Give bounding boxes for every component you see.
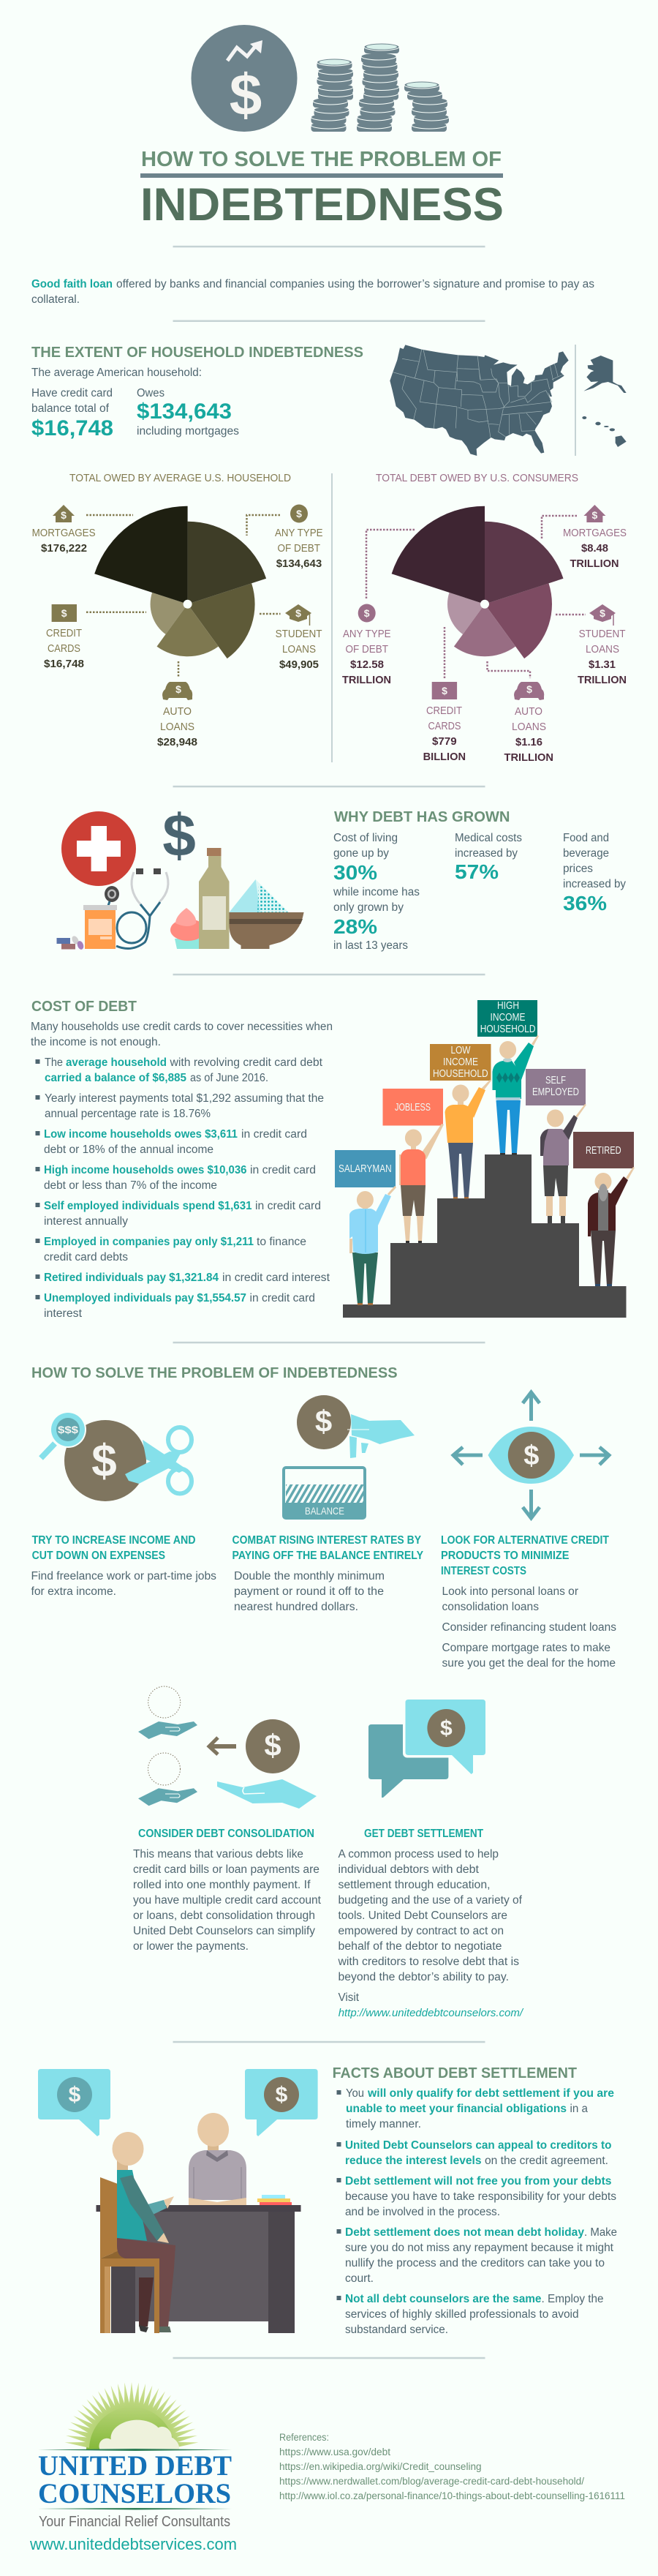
label: student loans: LOANS xyxy=(282,643,316,656)
bullet list: as of June 2016. xyxy=(190,1072,268,1084)
person: self employed xyxy=(526,1069,586,1223)
column: medical costs: increased by xyxy=(455,847,518,860)
text: nearest hundred dollars. xyxy=(234,1601,358,1613)
panel: facts about debt settlement xyxy=(333,2065,617,2336)
illustration: debt counselling meeting xyxy=(38,2069,318,2333)
bullet list: sure you do not miss any repayment because it might xyxy=(345,2242,614,2254)
label: auto loans xyxy=(487,661,553,764)
bullet list: The xyxy=(45,1056,63,1069)
references: https://www.usa.gov/debt xyxy=(279,2447,390,2457)
heading: FACTS ABOUT DEBT SETTLEMENT xyxy=(333,2065,577,2081)
bullet list: reduce the interest levels xyxy=(345,2155,481,2167)
label: credit cards: $779 xyxy=(432,735,457,748)
bullet list: carried a balance of $6,885 xyxy=(45,1072,186,1084)
icon: coin with magnifier and scissors: $ xyxy=(91,1436,117,1487)
text: This means that various debts like xyxy=(133,1848,303,1860)
bullet list: High income households owes $10,036 xyxy=(44,1164,247,1176)
stairs xyxy=(343,1154,626,1318)
column: cost of living: Cost of living xyxy=(333,832,398,844)
tip: cut expenses xyxy=(31,1411,216,1598)
text: individual debtors with debt xyxy=(338,1863,480,1876)
heading: COST OF DEBT xyxy=(31,999,137,1015)
map: Alaska and Hawaii xyxy=(582,356,627,447)
icon: hand dropping coin in box: $ xyxy=(315,1404,332,1438)
label: credit cards: $16,748 xyxy=(44,658,84,670)
bullet list xyxy=(35,1056,330,1320)
tip: debt consolidation xyxy=(133,1686,322,1953)
bullet list: . Employ the xyxy=(541,2293,604,2305)
label: mortgages xyxy=(32,505,133,555)
wordmark xyxy=(38,2450,232,2530)
label: any type of debt xyxy=(247,505,323,570)
icon: cupcake xyxy=(170,908,205,949)
label: any type of debt: TRILLION xyxy=(342,674,391,686)
icon: bottle xyxy=(199,848,230,949)
column: food and beverage: prices xyxy=(563,863,593,875)
person: low income household: HOUSEHOLD xyxy=(433,1068,488,1080)
title: INDEBTEDNESS xyxy=(140,179,504,230)
icon: coin passing between hands xyxy=(138,1686,317,1809)
icon: coin stacks xyxy=(311,43,449,132)
text: or loans, debt consolidation through xyxy=(133,1910,315,1922)
text xyxy=(441,1534,616,1670)
icon: eye coin with arrows: $ xyxy=(523,1441,539,1471)
text: GET DEBT SETTLEMENT xyxy=(364,1828,483,1840)
label: any type of debt: $ xyxy=(364,607,370,619)
illustration: medical and food costs xyxy=(57,803,304,950)
bullet list: Yearly interest payments total $1,292 assuming that the xyxy=(45,1092,324,1105)
person: low income household: INCOME xyxy=(443,1056,478,1068)
text: Visit xyxy=(338,1991,360,2004)
column: cost of living xyxy=(333,832,420,952)
text block: average household: $134,643 xyxy=(137,399,232,424)
icon: eye coin with arrows xyxy=(453,1392,609,1518)
text: rolled into one monthly payment. If xyxy=(133,1879,311,1891)
bullet list: You xyxy=(346,2087,364,2100)
column: cost of living: only grown by xyxy=(333,901,404,914)
text xyxy=(133,1828,322,1953)
text xyxy=(337,1828,524,2019)
bullet list: in credit card interest xyxy=(222,1272,330,1284)
label: any type of debt: $12.58 xyxy=(350,658,384,671)
text: TRY TO INCREASE INCOME AND xyxy=(32,1534,196,1547)
text: with creditors to resolve debt that is xyxy=(337,1956,519,1968)
label: student loans xyxy=(260,604,322,671)
bullet list: . Make xyxy=(584,2226,617,2239)
label: any type of debt xyxy=(342,530,415,686)
text: LOOK FOR ALTERNATIVE CREDIT xyxy=(441,1534,609,1547)
icon: dollar coin with rising arrow: $ xyxy=(230,62,262,127)
bullet list xyxy=(336,2087,617,2336)
map: United States xyxy=(390,345,569,456)
text: for extra income. xyxy=(31,1585,116,1598)
illustration: people on income staircase xyxy=(335,1000,635,1318)
text block: average household: The average American household: xyxy=(31,367,202,379)
website url: www.uniteddebtservices.com xyxy=(29,2535,237,2553)
person: low income household xyxy=(430,1044,491,1198)
label: student loans: $1.31 xyxy=(589,658,616,671)
bullet list: with revolving credit card debt xyxy=(169,1056,323,1069)
bullet list: in credit card xyxy=(250,1164,316,1176)
label: student loans: TRILLION xyxy=(578,674,627,686)
column: medical costs: 57% xyxy=(455,860,499,883)
tip: pay off the balance xyxy=(232,1395,424,1613)
text: Consider refinancing student loans xyxy=(442,1621,616,1634)
icon: speech bubbles with coin: $ xyxy=(440,1716,453,1741)
label: auto loans: LOANS xyxy=(160,721,194,733)
speech bubble right xyxy=(245,2069,318,2136)
logo: United Debt Counselors xyxy=(38,2382,232,2530)
panel: extent of household indebtedness xyxy=(31,345,627,456)
bullet list: Retired individuals pay $1,321.84 xyxy=(44,1272,219,1284)
bullet list: Employed in companies pay only $1,211 xyxy=(44,1236,254,1248)
person: high income household xyxy=(477,1000,539,1154)
heading: THE EXTENT OF HOUSEHOLD INDEBTEDNESS xyxy=(31,345,363,361)
label: any type of debt: OF DEBT xyxy=(278,542,320,555)
speech bubble left: $ xyxy=(69,2083,81,2107)
text block: good faith loan definition: collateral. xyxy=(31,293,80,306)
label: credit cards: CREDIT xyxy=(426,705,462,717)
text: PRODUCTS TO MINIMIZE xyxy=(441,1550,569,1562)
person: high income household: HIGH xyxy=(497,1000,519,1012)
text: Compare mortgage rates to make xyxy=(442,1642,610,1654)
person: retired xyxy=(573,1132,635,1286)
text: sure you get the deal for the home xyxy=(442,1657,616,1670)
text: tools. United Debt Counselors are xyxy=(338,1910,507,1922)
text xyxy=(232,1534,424,1613)
text block: average household: Have credit card xyxy=(31,387,113,399)
bullet list: because you have to take responsibility for your debts xyxy=(345,2190,616,2203)
column: cost of living: gone up by xyxy=(333,847,389,860)
bullet list: debt or less than 7% of the income xyxy=(44,1179,217,1192)
text: credit card bills or loan payments are xyxy=(133,1863,319,1876)
text: payment or round it off to the xyxy=(234,1585,384,1598)
bullet list: Not all debt counselors are the same xyxy=(345,2293,542,2305)
person: high income household: INCOME xyxy=(490,1012,526,1024)
text: settlement through education, xyxy=(338,1879,490,1891)
icon: bowl with grain xyxy=(230,879,304,949)
label: any type of debt: $ xyxy=(296,508,302,519)
label: auto loans: $ xyxy=(175,683,181,695)
column: food and beverage: increased by xyxy=(563,878,626,890)
label: credit cards: CREDIT xyxy=(46,627,82,639)
wordmark: Your Financial Relief Consultants xyxy=(39,2514,230,2530)
label: mortgages: MORTGAGES xyxy=(563,527,627,539)
text block: average household: Owes xyxy=(137,387,164,399)
books xyxy=(257,2195,292,2205)
heading: how to solve: HOW TO SOLVE THE PROBLEM OF INDEBTEDNESS xyxy=(31,1365,398,1381)
intro text: the income is not enough. xyxy=(31,1036,161,1048)
desk xyxy=(97,2205,301,2333)
label: credit cards xyxy=(423,627,466,763)
references: https://en.wikipedia.org/wiki/Credit_counseling xyxy=(279,2461,481,2472)
bullet list: unable to meet your financial obligations xyxy=(346,2103,567,2115)
wordmark: COUNSELORS xyxy=(38,2478,231,2509)
chart: rose chart consumers xyxy=(392,506,563,658)
text block: average household: balance total of xyxy=(31,402,110,415)
bullet list: in a xyxy=(570,2103,588,2115)
column: cost of living: 30% xyxy=(333,861,377,884)
tip: debt settlement xyxy=(337,1697,524,2019)
label: mortgages: $ xyxy=(592,509,598,521)
heading: TOTAL OWED BY AVERAGE U.S. HOUSEHOLD xyxy=(69,472,291,484)
tip: alternative credit products xyxy=(441,1392,616,1670)
text: CUT DOWN ON EXPENSES xyxy=(32,1550,165,1562)
text: INTEREST COSTS xyxy=(441,1565,526,1577)
heading: WHY DEBT HAS GROWN xyxy=(334,809,510,825)
text block: good faith loan definition: Good faith loan xyxy=(31,278,113,290)
text: consolidation loans xyxy=(442,1601,539,1613)
column: cost of living: in last 13 years xyxy=(333,939,408,952)
bullet list: Debt settlement will not free you from your debts xyxy=(345,2175,611,2188)
bullet list: Debt settlement does not mean debt holiday xyxy=(345,2226,584,2239)
person: high income household: HOUSEHOLD xyxy=(480,1024,535,1035)
column: cost of living: 28% xyxy=(333,915,377,938)
text block: average household xyxy=(31,367,239,440)
label: credit cards: CARDS xyxy=(48,642,80,655)
text: http://www.uniteddebtcounselors.com/ xyxy=(339,2007,524,2019)
bullet list: on the credit agreement. xyxy=(485,2155,608,2167)
bullet list: in credit card xyxy=(241,1128,307,1141)
icon: stethoscope xyxy=(105,868,168,949)
label: mortgages: $ xyxy=(61,509,67,521)
text block: good faith loan definition: offered by banks and financial companies using the borrower’s signature and promise to pay as xyxy=(116,278,594,290)
text: PAYING OFF THE BALANCE ENTIRELY xyxy=(232,1550,424,1562)
label: auto loans: AUTO xyxy=(163,705,192,718)
person: self employed: EMPLOYED xyxy=(532,1086,579,1098)
text xyxy=(31,1534,216,1598)
label: mortgages: $8.48 xyxy=(581,542,608,555)
label: student loans: STUDENT xyxy=(579,628,626,640)
icon: dollar coin with rising arrow xyxy=(192,25,297,132)
panel: total owed by average household xyxy=(32,472,322,748)
column: food and beverage: beverage xyxy=(563,847,609,860)
bullet list: average household xyxy=(66,1056,167,1069)
label: any type of debt: $134,643 xyxy=(276,557,322,570)
label: auto loans: LOANS xyxy=(512,721,546,733)
text: Look into personal loans or xyxy=(442,1585,578,1598)
person: retired: RETIRED xyxy=(586,1145,621,1157)
bullet list: substandard service. xyxy=(345,2324,448,2336)
person: self employed: SELF xyxy=(545,1075,566,1086)
bullet list: credit card debts xyxy=(44,1251,128,1263)
label: student loans: $ xyxy=(295,607,301,619)
label: credit cards xyxy=(44,604,146,670)
bullet list: United Debt Counselors can appeal to creditors to xyxy=(345,2139,611,2152)
label: mortgages xyxy=(542,505,627,570)
label: auto loans: TRILLION xyxy=(504,751,553,764)
label: credit cards: CARDS xyxy=(428,720,461,732)
label: any type of debt: ANY TYPE xyxy=(343,628,390,640)
column: food and beverage: Food and xyxy=(563,832,609,844)
text block: good faith loan definition xyxy=(31,278,594,306)
text block: average household: including mortgages xyxy=(137,425,239,438)
label: auto loans: AUTO xyxy=(515,705,542,718)
bullet list: debt or 18% of the annual income xyxy=(44,1144,213,1156)
intro text xyxy=(31,1021,333,1048)
person: low income household: LOW xyxy=(450,1045,471,1056)
label: student loans: $ xyxy=(600,607,605,619)
wordmark: UNITED DEBT xyxy=(38,2450,232,2482)
counselor xyxy=(189,2113,246,2205)
bullet list: court. xyxy=(345,2272,374,2285)
icon: dollar sign: $ xyxy=(162,803,196,869)
bullet list: in credit card xyxy=(255,1200,321,1212)
icon: coin passing between hands: $ xyxy=(264,1728,281,1762)
icon: coin with magnifier and scissors: $$$ xyxy=(58,1424,78,1435)
bullet list: will only qualify for debt settlement if you are xyxy=(367,2087,614,2100)
person: salaryman xyxy=(335,1150,396,1305)
person: salaryman: SALARYMAN xyxy=(339,1163,392,1175)
bullet list: nullify the process and the creditors can take you to xyxy=(345,2257,605,2269)
label: any type of debt: ANY TYPE xyxy=(275,527,323,539)
intro text: Many households use credit cards to cover necessities when xyxy=(31,1021,333,1033)
label: auto loans: $ xyxy=(526,683,532,695)
text: A common process used to help xyxy=(338,1848,499,1860)
text: you have multiple credit card account xyxy=(133,1894,322,1907)
bullet list: Self employed individuals spend $1,631 xyxy=(44,1200,252,1212)
person: jobless xyxy=(383,1089,444,1243)
bullet list: to finance xyxy=(257,1236,306,1248)
speech bubble left xyxy=(38,2069,110,2136)
column: food and beverage xyxy=(563,832,626,915)
column: medical costs: Medical costs xyxy=(455,832,522,844)
label: credit cards: BILLION xyxy=(423,751,466,763)
bullet list: and be involved in the process. xyxy=(345,2206,500,2218)
label: mortgages: $176,222 xyxy=(41,542,87,555)
label: any type of debt: OF DEBT xyxy=(345,643,388,656)
heading: TOTAL DEBT OWED BY U.S. CONSUMERS xyxy=(376,472,578,484)
text: behalf of the debtor to negotiate xyxy=(338,1940,502,1953)
icon: medical cross xyxy=(61,811,136,886)
title: HOW TO SOLVE THE PROBLEM OF xyxy=(141,148,502,171)
text: empowered by contract to act on xyxy=(338,1925,504,1937)
title xyxy=(140,148,504,230)
bullet list: interest annually xyxy=(44,1215,128,1228)
panel: cost of debt text xyxy=(31,999,333,1320)
references: http://www.iol.co.za/personal-finance/10-things-about-debt-counselling-1616111 xyxy=(279,2490,625,2501)
icon: sun and cloud xyxy=(38,2382,232,2451)
bullet list: services of highly skilled professionals to avoid xyxy=(345,2308,579,2321)
text: United Debt Counselors can simplify xyxy=(133,1925,315,1937)
text: budgeting and the use of a variety of xyxy=(338,1894,523,1907)
references: References: xyxy=(279,2432,329,2443)
label: auto loans: $28,948 xyxy=(157,736,197,748)
bullet list: annual percentage rate is 18.76% xyxy=(45,1108,211,1120)
client in chair xyxy=(100,2132,175,2333)
bullet list: interest xyxy=(44,1307,83,1320)
text: CONSIDER DEBT CONSOLIDATION xyxy=(138,1828,314,1840)
label: credit cards: $ xyxy=(442,685,447,696)
label: credit cards: $ xyxy=(61,607,67,619)
text: beyond the debtor’s ability to pay. xyxy=(338,1971,509,1983)
panel: total debt owed by consumers xyxy=(342,472,627,764)
panel: why debt has grown xyxy=(333,809,626,952)
text: Find freelance work or part-time jobs xyxy=(31,1570,216,1582)
speech bubble right: $ xyxy=(276,2083,288,2107)
text: COMBAT RISING INTEREST RATES BY xyxy=(232,1534,422,1547)
text: Double the monthly minimum xyxy=(234,1570,385,1582)
icon: pill bottle xyxy=(57,905,117,950)
label: mortgages: TRILLION xyxy=(570,557,619,570)
bullet list: in credit card xyxy=(250,1292,315,1304)
column: food and beverage: 36% xyxy=(563,892,607,915)
label: student loans: $49,905 xyxy=(279,658,319,671)
bullet list: Unemployed individuals pay $1,554.57 xyxy=(44,1292,246,1304)
chart: rose chart household xyxy=(94,506,266,658)
label: student loans: LOANS xyxy=(586,643,619,656)
column: medical costs xyxy=(455,832,522,883)
icon: hand dropping coin in box xyxy=(282,1395,415,1520)
references xyxy=(279,2432,625,2501)
label: mortgages: MORTGAGES xyxy=(32,527,96,539)
person: jobless: JOBLESS xyxy=(395,1102,431,1114)
icon: hand dropping coin in box: BALANCE xyxy=(305,1505,344,1517)
label: auto loans xyxy=(157,661,197,748)
label: student loans: STUDENT xyxy=(276,628,322,640)
bullet list: Low income households owes $3,611 xyxy=(44,1128,238,1141)
references: https://www.nerdwallet.com/blog/average-credit-card-debt-household/ xyxy=(279,2476,584,2487)
label: auto loans: $1.16 xyxy=(515,736,542,748)
text block: average household: $16,748 xyxy=(31,416,113,440)
bullet list: timely manner. xyxy=(346,2118,421,2130)
icon: coin with magnifier and scissors xyxy=(41,1411,192,1501)
label: student loans xyxy=(556,604,627,686)
text: or lower the payments. xyxy=(133,1940,249,1953)
column: cost of living: while income has xyxy=(333,886,420,898)
icon: speech bubbles with coin xyxy=(368,1697,488,1798)
